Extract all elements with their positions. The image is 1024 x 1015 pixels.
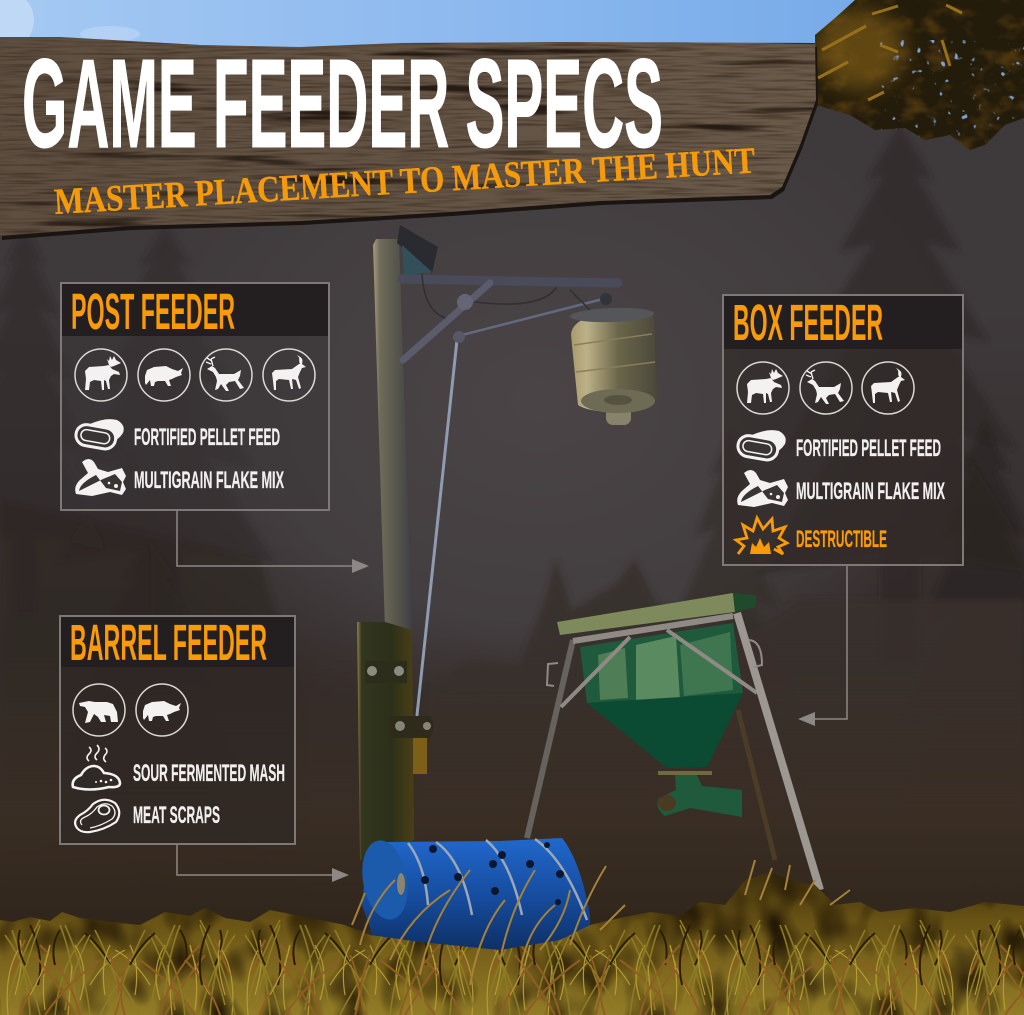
- background forest silhouettes: [0, 125, 1024, 930]
- icon: whitetail deer: [200, 349, 252, 401]
- icon: flake mix: [75, 459, 126, 496]
- panel: barrel feeder: BARREL FEEDER: [70, 614, 267, 671]
- icon: pellet feed: [736, 430, 786, 462]
- solar panel: [397, 225, 438, 276]
- post feeder object: [357, 225, 657, 860]
- icon: meat: [75, 800, 119, 832]
- hopper lid: [557, 593, 756, 635]
- wood plank banner: [0, 30, 830, 240]
- tall grass stalks: [352, 860, 850, 985]
- icon: moose: [75, 349, 127, 401]
- icon: moose: [737, 362, 789, 414]
- icon: sour mash: [73, 745, 120, 790]
- upper haze: [0, 40, 1024, 640]
- lower post: [357, 622, 414, 860]
- icon: flake mix: [737, 470, 788, 507]
- box feeder object: [527, 593, 820, 890]
- frame bars and right leg: [547, 613, 820, 890]
- foreground grass: [0, 872, 1024, 1015]
- sky: [0, 0, 1024, 60]
- hopper funnel: [587, 693, 743, 768]
- arrow: post feeder: [177, 510, 369, 573]
- text: sour fermented mash: SOUR FERMENTED MASH: [133, 760, 285, 787]
- lower forest haze: [0, 640, 1024, 930]
- subtitle: MASTER PLACEMENT TO MASTER THE HUNT: [53, 140, 757, 223]
- backdrop below tree: [816, 60, 1024, 160]
- icon: bear: [73, 684, 125, 736]
- autumn tree foliage: [810, 0, 1024, 155]
- text: multigrain flake mix: MULTIGRAIN FLAKE MIX: [134, 467, 284, 494]
- hanging bucket: [570, 307, 657, 425]
- rear ladder leg: [738, 710, 775, 860]
- hopper light panels: [598, 632, 733, 704]
- hopper spout: [657, 771, 742, 817]
- feeder pole: [373, 239, 412, 630]
- fog glow: [110, 60, 970, 740]
- panel: barrel feeder: [60, 614, 295, 844]
- arrow: barrel feeder: [177, 844, 349, 882]
- panel: post feeder: POST FEEDER: [71, 283, 235, 340]
- icon: whitetail deer: [800, 362, 852, 414]
- post brackets: [365, 661, 434, 774]
- hopper body: [580, 623, 743, 703]
- post feeder header bar: [62, 284, 328, 336]
- icon: pellet feed: [74, 419, 124, 451]
- panel: box feeder: DESTRUCTIBLE: [796, 526, 887, 553]
- feeder arm and braces: [402, 274, 618, 715]
- icon: boar: [138, 349, 190, 401]
- icon: antelope: [862, 362, 914, 414]
- left leg: [527, 640, 573, 838]
- icon: explosion: [736, 518, 787, 554]
- icon: boar: [136, 684, 188, 736]
- barrel feeder header bar: [61, 617, 294, 667]
- panel: post feeder: [61, 283, 329, 510]
- arrow: box feeder: [798, 565, 847, 726]
- icon: antelope: [263, 349, 315, 401]
- box feeder header bar: [724, 296, 962, 349]
- panel: box feeder: [723, 294, 963, 565]
- blue barrel feeder: [356, 837, 590, 970]
- text: meat scraps: MEAT SCRAPS: [133, 802, 220, 829]
- panel: post feeder: FORTIFIED PELLET FEED: [134, 424, 280, 451]
